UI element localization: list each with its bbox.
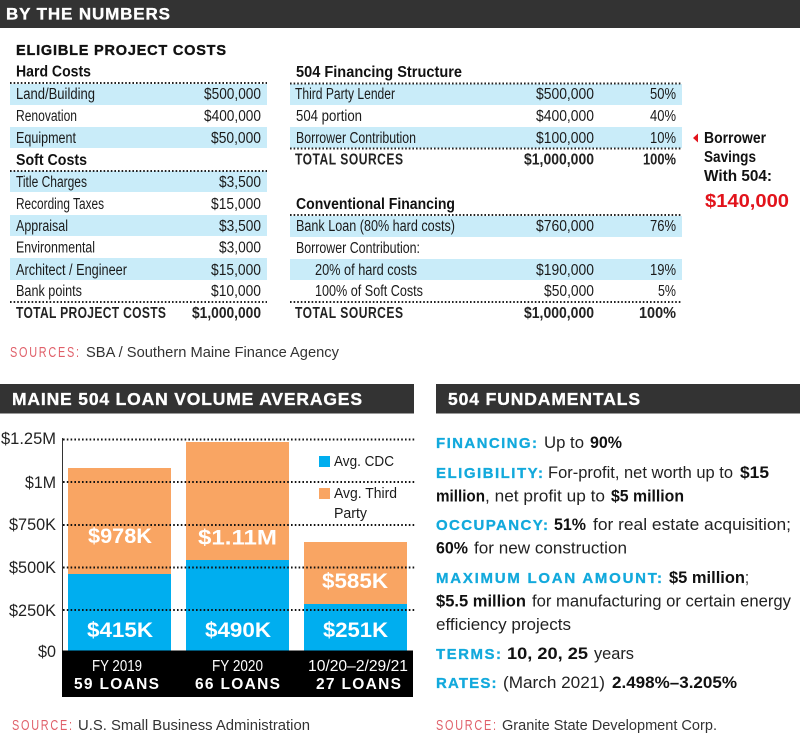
row: bank loan: $760,000 (536, 218, 594, 235)
row: appraisal: $3,500 (219, 218, 261, 235)
row: third party lender: $500,000 (536, 86, 594, 103)
row: bank points: Bank points (16, 283, 82, 300)
x axis band: 66 LOANS (195, 676, 280, 693)
source line: fundamentals: Granite State Development Corp. (502, 718, 717, 734)
row: recording taxes (16, 196, 261, 213)
item: financing (436, 434, 622, 452)
row: land/building: Land/Building (16, 86, 95, 103)
row: 100% of soft costs: 5% (658, 283, 676, 300)
row: architect / engineer: Architect / Engineer (16, 262, 127, 279)
bar value labels: $490K (205, 619, 271, 642)
row: total sources: TOTAL SOURCES (295, 150, 403, 168)
row: third party lender: 50% (650, 86, 676, 103)
row: total sources (295, 150, 676, 168)
source line: fundamentals: SOURCE: (436, 716, 496, 733)
y axis labels: $500K (9, 558, 57, 577)
row: total project costs (16, 304, 261, 322)
item: eligibility: million (436, 488, 485, 506)
row: 504 portion: 40% (650, 108, 676, 125)
header: by the numbers: BY THE NUMBERS (6, 4, 170, 24)
item: maximum loan amount: ; (745, 569, 749, 587)
bar chart: loan volume averages (1, 429, 415, 697)
row: appraisal (16, 218, 261, 235)
item: financing: FINANCING: (436, 435, 537, 452)
row: borrower contribution: Borrower Contribution (296, 130, 416, 147)
row: environmental: $3,000 (219, 240, 261, 256)
item: rates: 2.498%–3.205% (612, 674, 737, 692)
panel: 504 financing structure (290, 64, 682, 168)
bar value labels: $585K (322, 570, 388, 593)
panel: conventional financing (290, 196, 682, 322)
row: borrower contribution label: Borrower Contribution: (296, 240, 420, 257)
callout text: Savings (704, 149, 756, 166)
callout text: With 504: (704, 168, 772, 185)
item: occupancy: 51% (554, 516, 586, 534)
item: rates: (March 2021) (503, 674, 605, 692)
source line: loan volume (12, 716, 310, 734)
row: renovation: Renovation (16, 108, 77, 125)
item: eligibility (436, 464, 769, 506)
item: maximum loan amount: for manufacturing or certain energy (532, 592, 792, 610)
item: maximum loan amount: $5.5 million (436, 592, 526, 610)
header: by the numbers (0, 0, 800, 28)
item: occupancy: for real estate acquisition; (593, 516, 791, 534)
row: total sources: 100% (639, 305, 676, 322)
header: 504 fundamentals: 504 FUNDAMENTALS (448, 389, 640, 409)
source line: loan volume: U.S. Small Business Administration (78, 718, 310, 734)
item: terms (436, 645, 634, 663)
row: equipment: Equipment (16, 130, 77, 147)
icon: red arrow (693, 134, 698, 142)
row: borrower contribution (296, 130, 676, 147)
y axis labels: $250K (9, 601, 57, 620)
header: 504 fundamentals (436, 384, 800, 414)
row: borrower contribution: 10% (650, 130, 676, 147)
row: bank points (16, 283, 261, 300)
row: 20% of hard costs (315, 262, 676, 279)
row: total sources: $1,000,000 (524, 152, 594, 168)
axis line (62, 438, 64, 652)
row: 20% of hard costs: 20% of hard costs (315, 262, 417, 279)
x axis band: 27 LOANS (316, 676, 401, 693)
item: occupancy: 60% (436, 540, 468, 558)
item: eligibility: For-profit, net worth up to (548, 464, 733, 482)
row: equipment: $50,000 (211, 130, 261, 147)
item: terms: years (594, 645, 634, 663)
item: eligibility: $15 (740, 464, 769, 482)
row: appraisal: Appraisal (16, 218, 68, 235)
callout text: Borrower (704, 130, 766, 147)
row: 20% of hard costs: 19% (650, 262, 676, 279)
row: bank loan (296, 218, 676, 235)
legend: Avg. CDC (334, 453, 394, 470)
row: 504 portion: 504 portion (296, 108, 362, 125)
row: architect / engineer: $15,000 (211, 262, 261, 279)
item: rates (436, 674, 737, 692)
callout value: $140,000 (705, 191, 789, 211)
item: occupancy: OCCUPANCY: (436, 517, 548, 534)
y axis labels: $750K (9, 515, 57, 534)
subheading: hard costs: Hard Costs (16, 64, 91, 80)
bar: 10/20-2/29/21 (304, 542, 407, 651)
row: title charges (16, 174, 261, 191)
row: total project costs: TOTAL PROJECT COSTS (16, 304, 166, 321)
item: maximum loan amount: $5 million (669, 569, 745, 587)
panel: 504 fundamentals list (436, 434, 792, 692)
bar: FY 2020 (186, 442, 289, 651)
item: occupancy (436, 516, 791, 558)
y axis labels: $1M (25, 473, 56, 492)
row: bank loan: 76% (650, 218, 676, 235)
item: occupancy: for new construction (474, 540, 627, 558)
y axis labels (1, 429, 57, 661)
row: 100% of soft costs: $50,000 (544, 283, 594, 300)
row: total project costs: $1,000,000 (192, 305, 261, 322)
heading: eligible project costs: ELIGIBLE PROJECT COSTS (16, 43, 226, 59)
item: rates: RATES: (436, 675, 496, 692)
row: 504 portion (296, 108, 676, 125)
legend: Avg. Third (334, 485, 397, 502)
source line: project costs: SOURCES: (10, 343, 79, 360)
source line: loan volume: SOURCE: (12, 716, 72, 733)
source line: project costs: SBA / Southern Maine Finance Agency (86, 345, 340, 361)
callout text (704, 130, 772, 185)
row: total sources: $1,000,000 (524, 305, 594, 322)
item: maximum loan amount: efficiency projects (436, 616, 571, 634)
item: maximum loan amount (436, 569, 792, 634)
bar value labels: $978K (88, 525, 152, 548)
subheading: conventional financing: Conventional Financing (296, 196, 455, 213)
y axis labels: $0 (38, 642, 56, 661)
row: renovation (16, 108, 261, 125)
row: 100% of soft costs (315, 283, 676, 300)
row: environmental: Environmental (16, 240, 95, 256)
item: terms: 10, 20, 25 (507, 645, 588, 663)
bar value labels: $251K (323, 619, 388, 642)
header: maine 504 loan volume averages (0, 384, 414, 414)
row: renovation: $400,000 (204, 108, 261, 125)
source line: project costs (10, 343, 340, 361)
row: land/building: $500,000 (204, 86, 261, 103)
x axis band: 59 LOANS (74, 676, 159, 693)
row: borrower contribution: $100,000 (536, 130, 594, 147)
row: recording taxes: $15,000 (211, 196, 261, 213)
y axis labels: $1.25M (1, 429, 56, 448)
x axis band (62, 650, 413, 697)
item: financing: 90% (590, 434, 622, 452)
bar value labels: $415K (87, 619, 153, 642)
subheading: 504 financing structure: 504 Financing Structure (296, 64, 462, 81)
row: environmental (16, 240, 261, 256)
row: total sources: 100% (643, 152, 676, 168)
row: architect / engineer (16, 262, 261, 279)
x axis band: FY 2020 (212, 658, 263, 675)
source line: fundamentals (436, 716, 717, 734)
x axis band: FY 2019 (92, 658, 142, 675)
item: maximum loan amount: MAXIMUM LOAN AMOUNT: (436, 570, 662, 587)
row: title charges: $3,500 (219, 174, 261, 191)
row: recording taxes: Recording Taxes (16, 196, 104, 213)
row: total sources (295, 304, 676, 322)
item: terms: TERMS: (436, 646, 501, 663)
row: third party lender (295, 86, 676, 103)
row: 504 portion: $400,000 (536, 108, 594, 125)
row: bank loan: Bank Loan (80% hard costs) (296, 218, 455, 235)
item: eligibility: ELIGIBILITY: (436, 465, 543, 482)
x axis band: 10/20–2/29/21 (308, 658, 408, 675)
bar: FY 2019 (68, 468, 171, 651)
row: equipment (16, 130, 261, 147)
subheading: soft costs: Soft Costs (16, 152, 87, 169)
row: third party lender: Third Party Lender (295, 86, 395, 103)
bar value labels: $1.11M (198, 526, 277, 550)
row: title charges: Title Charges (16, 174, 87, 191)
legend (319, 453, 397, 522)
row: bank points: $10,000 (211, 283, 261, 300)
item: eligibility: $5 million (611, 488, 684, 506)
row: 20% of hard costs: $190,000 (536, 262, 594, 279)
row: total sources: TOTAL SOURCES (295, 304, 403, 321)
item: eligibility: , net profit up to (485, 488, 605, 506)
legend: Party (334, 505, 367, 522)
callout: borrower savings (693, 130, 789, 211)
row: 100% of soft costs: 100% of Soft Costs (315, 283, 423, 300)
header: maine 504 loan volume averages: MAINE 504 LOAN VOLUME AVERAGES (12, 389, 362, 409)
row: land/building (16, 86, 261, 103)
bar value labels (87, 525, 388, 642)
panel: eligible project costs (10, 43, 267, 322)
item: financing: Up to (544, 434, 584, 452)
